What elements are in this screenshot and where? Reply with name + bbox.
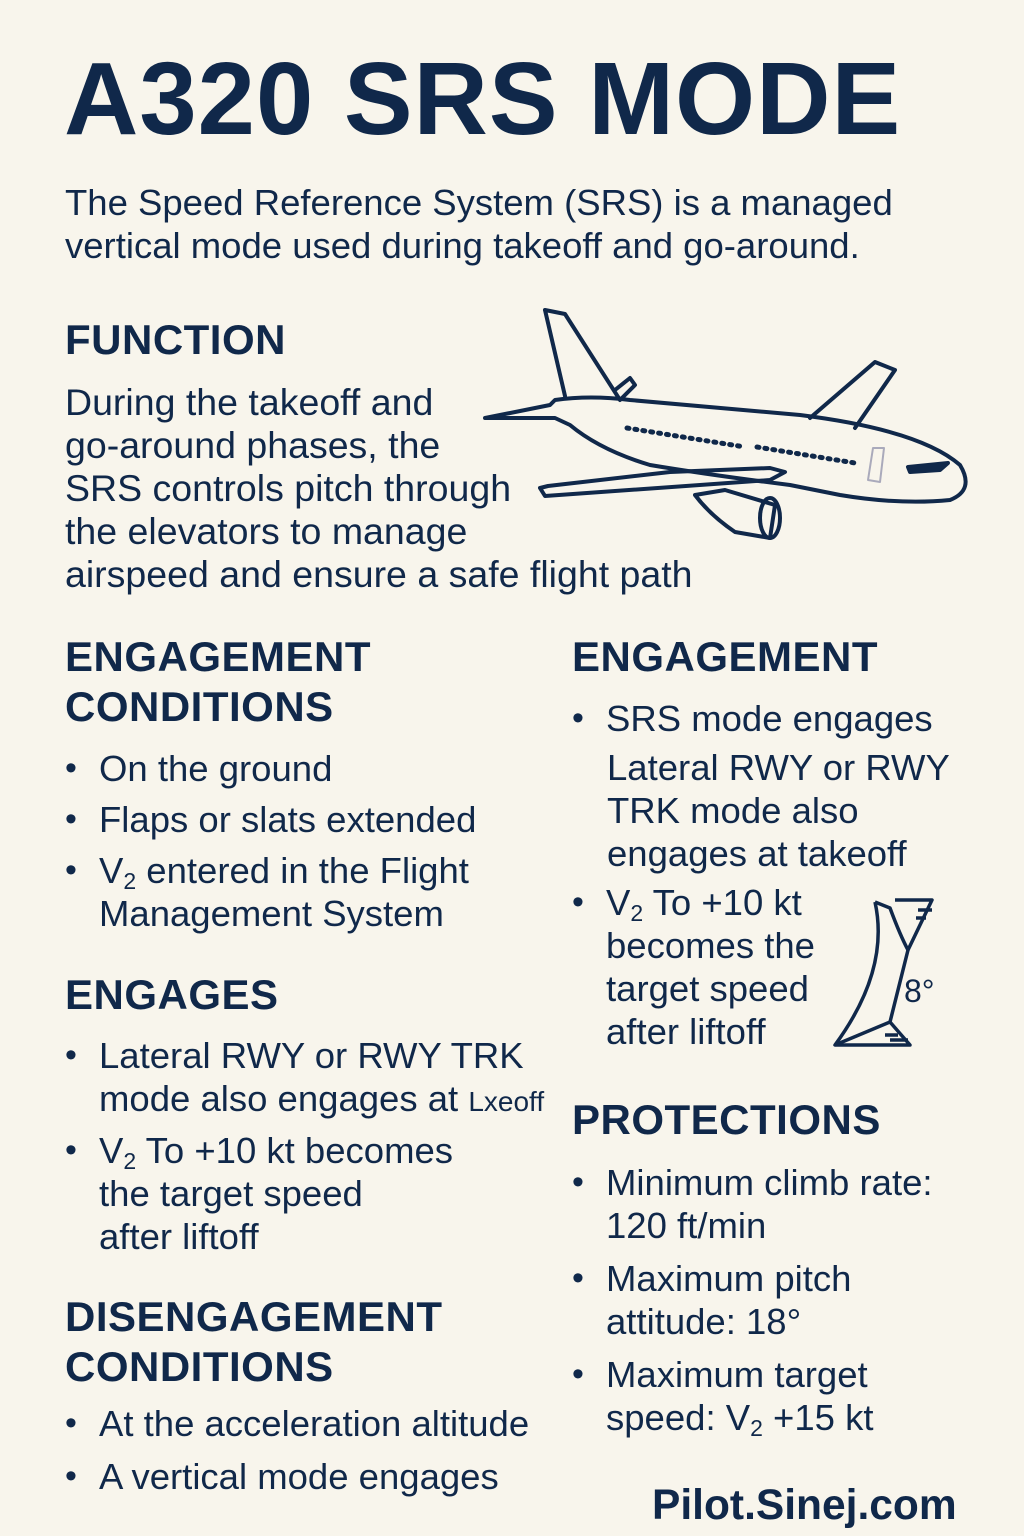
- icon: pitch 8 degrees: 8°: [904, 973, 935, 1009]
- intro text: vertical mode used during takeoff and go-around.: [65, 225, 860, 266]
- list: protections: Maximum pitch: [606, 1258, 851, 1299]
- list: engagement conditions: On the ground: [99, 748, 332, 789]
- heading: protections: PROTECTIONS: [572, 1096, 881, 1143]
- title: A320 SRS MODE: [64, 41, 901, 156]
- list: engagement: SRS mode engages: [606, 698, 933, 739]
- heading: disengagement conditions: DISENGAGEMENT: [65, 1293, 443, 1340]
- icon: pitch 8 degrees: [833, 898, 935, 1047]
- list: engagement: Lateral RWY or RWY: [607, 747, 950, 788]
- heading: engagement conditions: [65, 633, 371, 730]
- list: engages: the target speed: [99, 1173, 363, 1214]
- list: disengagement conditions: [66, 1403, 529, 1497]
- list: protections: Maximum target: [606, 1354, 868, 1395]
- list: engages: Lateral RWY or RWY TRK: [99, 1035, 524, 1076]
- list: engagement: becomes the: [606, 925, 815, 966]
- intro text: [65, 182, 893, 266]
- function text: airspeed and ensure a safe flight path: [65, 553, 693, 595]
- list: disengagement conditions: At the acceleration altitude: [99, 1403, 529, 1444]
- list: engagement: TRK mode also: [607, 790, 859, 831]
- list: engagement: engages at takeoff: [607, 833, 907, 874]
- footer: website: Pilot.Sinej.com: [652, 1482, 957, 1529]
- list: engagement: [573, 698, 950, 1052]
- list: engages: [66, 1035, 544, 1257]
- function text: go-around phases, the: [65, 424, 440, 466]
- list: engagement: target speed: [606, 968, 809, 1009]
- heading: disengagement conditions: [65, 1293, 443, 1390]
- heading: engages: ENGAGES: [65, 971, 279, 1018]
- function text: SRS controls pitch through: [65, 467, 511, 509]
- list: protections: speed: V2 +15 kt: [606, 1397, 873, 1441]
- heading: disengagement conditions: CONDITIONS: [65, 1343, 334, 1390]
- icon: airplane: [483, 308, 968, 540]
- heading: engagement: ENGAGEMENT: [572, 633, 878, 680]
- list: engagement: V2 To +10 kt: [606, 882, 802, 926]
- list: engagement conditions: [66, 748, 476, 934]
- list: engages: after liftoff: [99, 1216, 259, 1257]
- function text: the elevators to manage: [65, 510, 467, 552]
- intro text: The Speed Reference System (SRS) is a managed: [65, 182, 893, 223]
- list: protections: attitude: 18°: [606, 1301, 801, 1342]
- heading: engagement conditions: CONDITIONS: [65, 683, 334, 730]
- list: engages: mode also engages at Lxeoff: [99, 1078, 544, 1119]
- list: protections: [573, 1162, 933, 1441]
- list: protections: Minimum climb rate:: [606, 1162, 933, 1203]
- function text: During the takeoff and: [65, 381, 433, 423]
- list: disengagement conditions: A vertical mode engages: [99, 1456, 499, 1497]
- heading: engagement conditions: ENGAGEMENT: [65, 633, 371, 680]
- list: engagement conditions: V2 entered in the Flight: [99, 850, 469, 894]
- list: engagement conditions: Management System: [99, 893, 444, 934]
- function text: [65, 381, 693, 595]
- list: engagement conditions: Flaps or slats extended: [99, 799, 476, 840]
- heading: function: FUNCTION: [65, 316, 286, 363]
- list: engages: V2 To +10 kt becomes: [99, 1130, 453, 1174]
- list: engagement: after liftoff: [606, 1011, 766, 1052]
- list: protections: 120 ft/min: [606, 1205, 766, 1246]
